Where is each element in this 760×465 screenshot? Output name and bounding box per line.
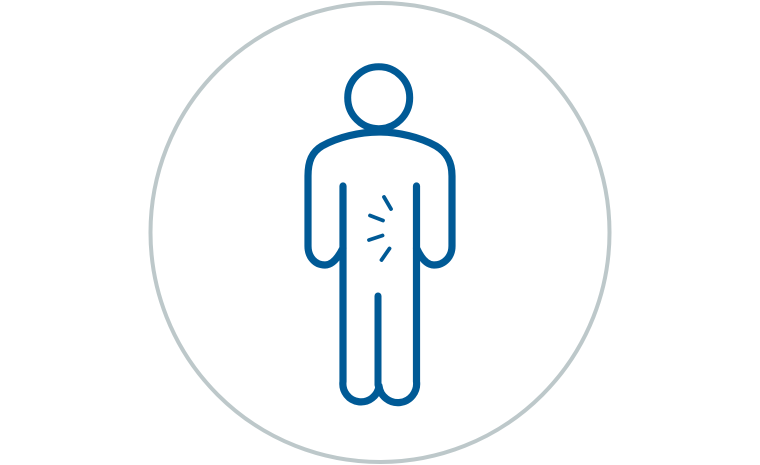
- pain mark 1: [384, 197, 391, 209]
- pain marks: [369, 197, 391, 260]
- icon: human figure: [308, 67, 452, 403]
- pain mark 3: [369, 236, 382, 240]
- body outline with arms and shoulders: [308, 132, 452, 265]
- outer circle: [150, 3, 610, 462]
- inner leg line: [374, 296, 382, 385]
- head: [348, 67, 410, 129]
- legs and feet: [343, 248, 417, 403]
- pain mark 4: [382, 248, 390, 260]
- pain mark 2: [370, 216, 383, 220]
